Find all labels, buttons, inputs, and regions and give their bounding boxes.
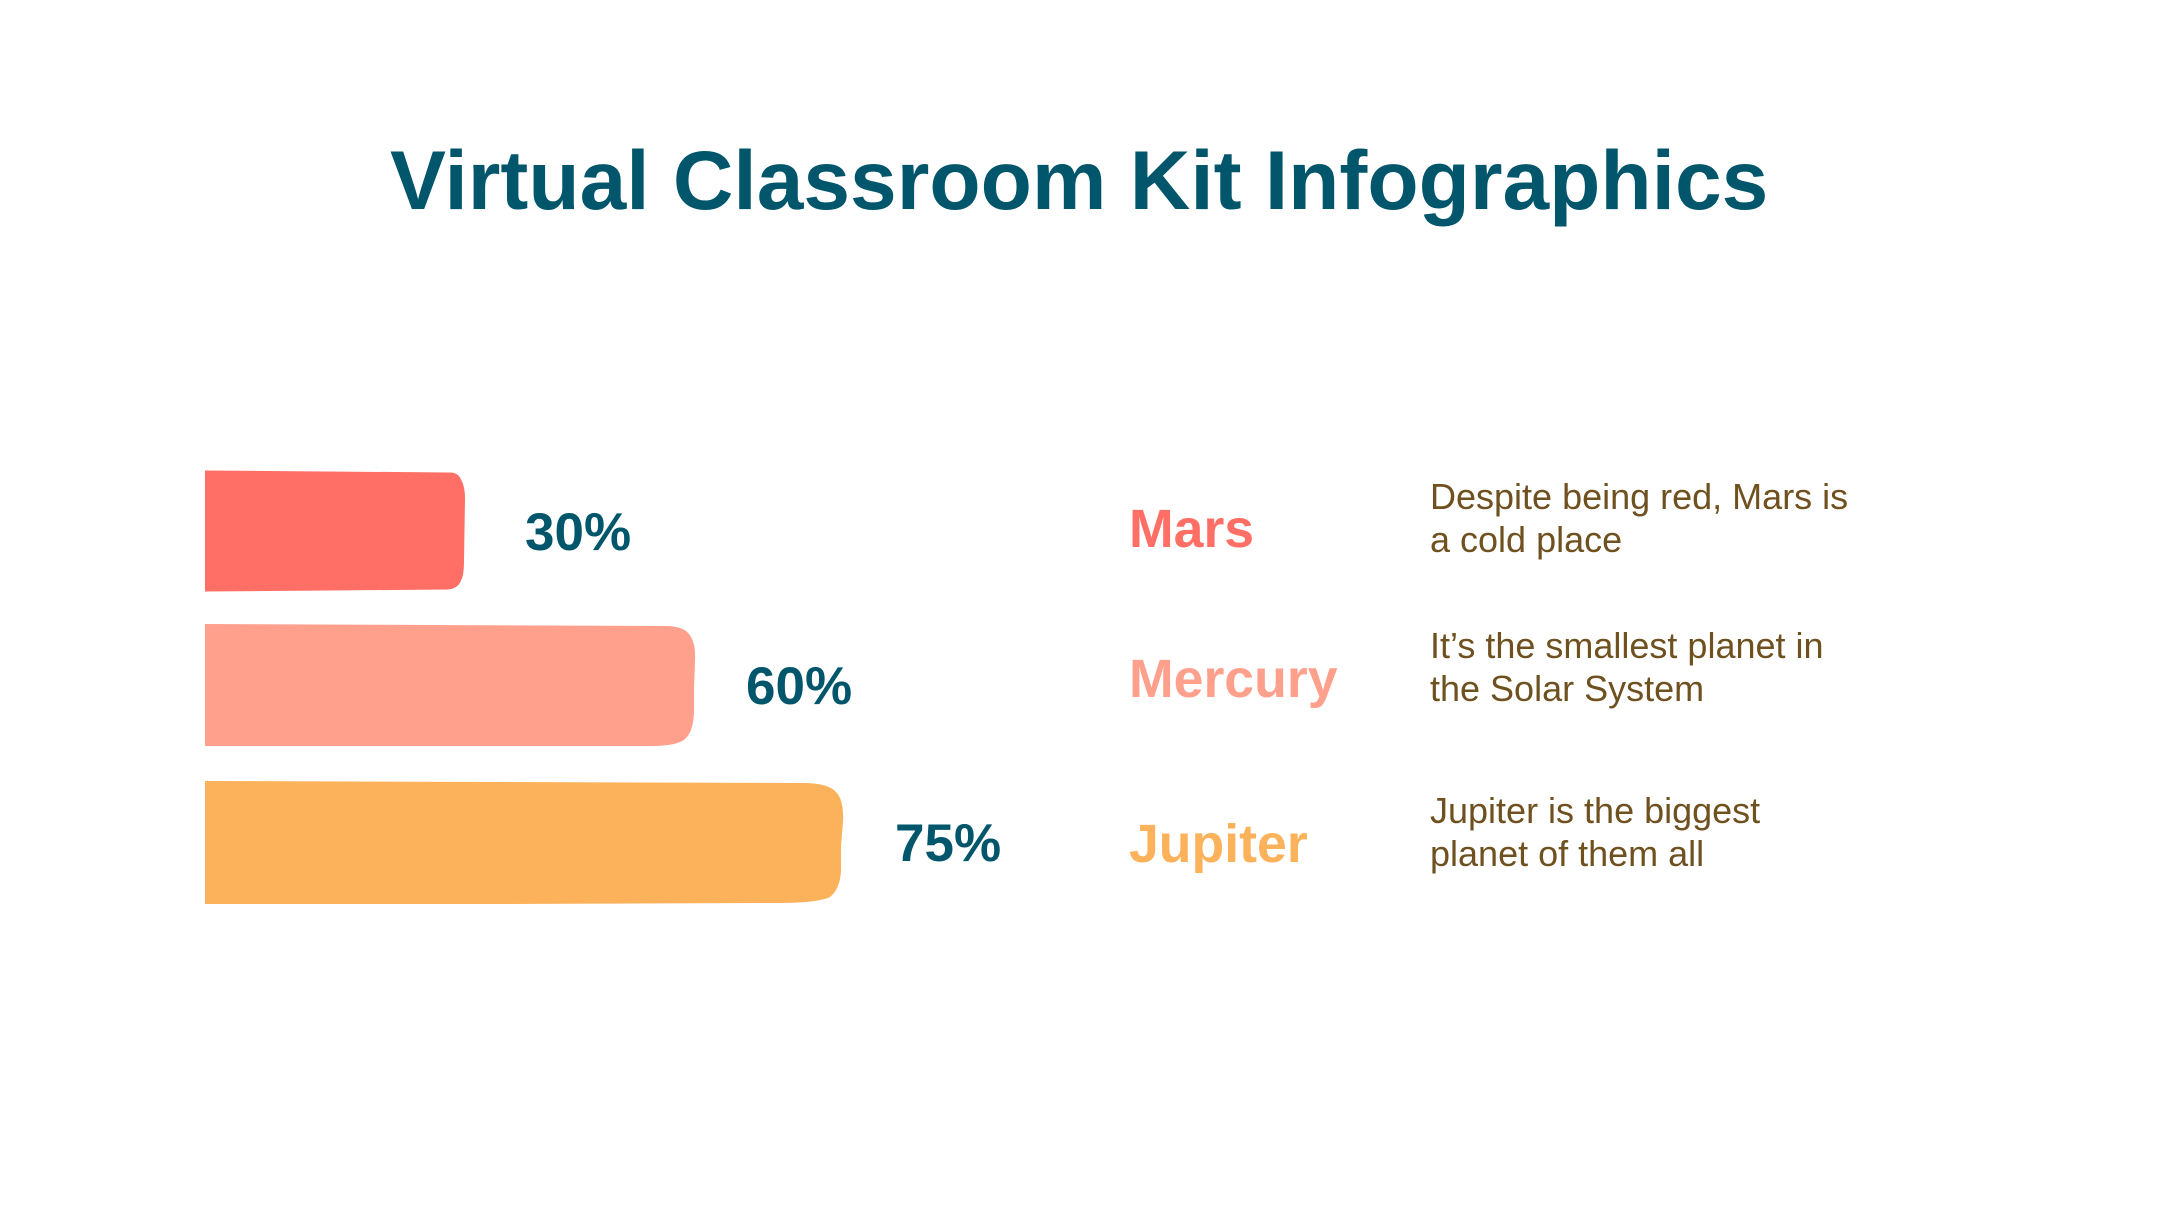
title: Virtual Classroom Kit Infographics bbox=[390, 133, 1768, 227]
description: Jupiter: Jupiter is the biggest bbox=[1430, 790, 1760, 831]
description: Mars: Despite being red, Mars is bbox=[1430, 476, 1848, 517]
description: Jupiter: planet of them all bbox=[1430, 833, 1704, 874]
bar: Jupiter 75% bbox=[205, 781, 843, 904]
value: 30%: 30% bbox=[525, 503, 631, 562]
label: Mercury: Mercury bbox=[1129, 649, 1338, 709]
value: 60%: 60% bbox=[746, 657, 852, 716]
label: Jupiter: Jupiter bbox=[1129, 814, 1308, 874]
row: Jupiter bbox=[1129, 790, 1760, 874]
description: Mars: a cold place bbox=[1430, 519, 1622, 560]
row: Mars bbox=[1129, 476, 1848, 560]
row: Mercury bbox=[1129, 625, 1824, 709]
bar: Mars 30% bbox=[205, 470, 465, 592]
description: Mercury: It’s the smallest planet in bbox=[1430, 625, 1824, 666]
value: 75%: 75% bbox=[895, 814, 1001, 873]
description: Mercury: the Solar System bbox=[1430, 668, 1704, 709]
bar: Mercury 60% bbox=[205, 624, 695, 746]
bar chart bbox=[205, 470, 1001, 904]
label: Mars: Mars bbox=[1129, 499, 1254, 559]
